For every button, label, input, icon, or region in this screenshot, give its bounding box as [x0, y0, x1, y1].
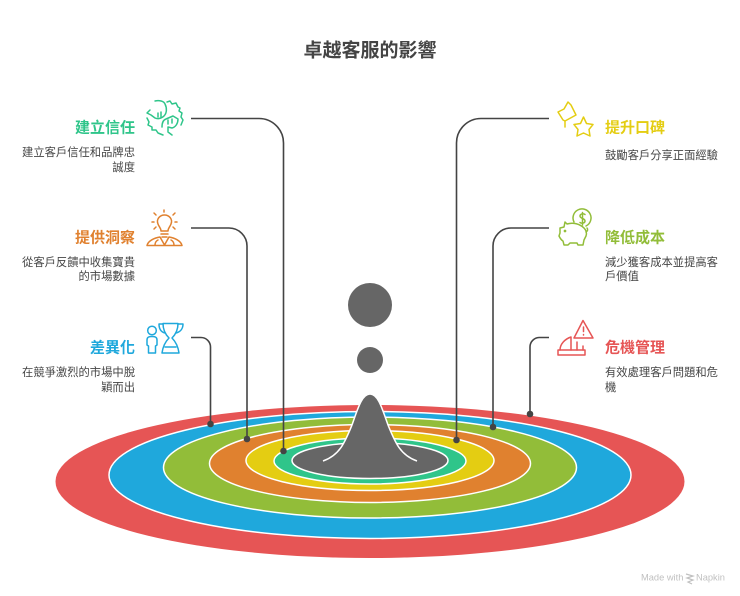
- ring: 降低成本 olive: [164, 417, 576, 518]
- description: 機: [605, 380, 616, 394]
- connector: 建立信任: [191, 118, 287, 454]
- panel: 差異化: [22, 324, 183, 394]
- connector: 危機管理: [527, 338, 549, 417]
- panel: 建立信任: [22, 101, 183, 174]
- description: 鼓勵客戶分享正面經驗: [605, 148, 718, 162]
- large droplet: [348, 283, 392, 327]
- panel: 降低成本: [559, 209, 718, 283]
- connector: 降低成本: [490, 228, 549, 430]
- ring: 建立信任 teal: [274, 438, 466, 484]
- description: 在競爭激烈的市場中脫: [22, 365, 135, 379]
- watermark: Napkin: [696, 572, 725, 582]
- icon: hard hat and warning: [558, 320, 593, 355]
- connector: 提升口碑: [453, 118, 549, 443]
- title: 卓越客服的影響: [303, 38, 437, 62]
- watermark: [641, 572, 725, 584]
- description: 減少獲客成本並提高客: [605, 255, 718, 269]
- ring: 提供洞察 orange: [210, 424, 530, 502]
- description: 從客戶反饋中收集寶貴: [22, 255, 135, 269]
- heading: 差異化: [90, 338, 135, 356]
- ring: center dark: [292, 442, 448, 478]
- icon: lightbulb over person: [147, 210, 182, 246]
- panel: 提供洞察: [22, 210, 182, 283]
- icon: shaking hands: [147, 101, 183, 135]
- concentric ripple rings chart: [56, 405, 684, 558]
- icon: napkin logo: [686, 574, 693, 584]
- ring: 差異化 blue: [109, 412, 631, 538]
- watermark: Made with: [641, 572, 683, 582]
- small droplet: [357, 347, 383, 373]
- icon: piggy bank and coin: [559, 209, 591, 245]
- icon: person and trophy: [147, 324, 183, 353]
- icon: flag and star: [558, 102, 593, 136]
- description: 戶價值: [605, 269, 639, 283]
- heading: 降低成本: [605, 228, 665, 246]
- water peak: [323, 394, 417, 461]
- description: 建立客戶信任和品牌忠: [22, 145, 135, 159]
- connector: 提供洞察: [191, 228, 250, 442]
- connector: 差異化: [191, 338, 214, 427]
- heading: 危機管理: [605, 338, 665, 356]
- heading: 建立信任: [75, 118, 135, 136]
- description: 誠度: [112, 160, 135, 174]
- ring: 提升口碑 yellow: [246, 430, 494, 490]
- description: 穎而出: [101, 380, 135, 394]
- panel: 提升口碑: [558, 102, 718, 162]
- description: 有效處理客戶問題和危: [605, 365, 718, 379]
- description: 的市場數據: [78, 269, 135, 283]
- panel: 危機管理: [558, 320, 718, 394]
- ring: 危機管理 red: [56, 405, 684, 558]
- heading: 提供洞察: [75, 228, 135, 246]
- heading: 提升口碑: [605, 120, 665, 136]
